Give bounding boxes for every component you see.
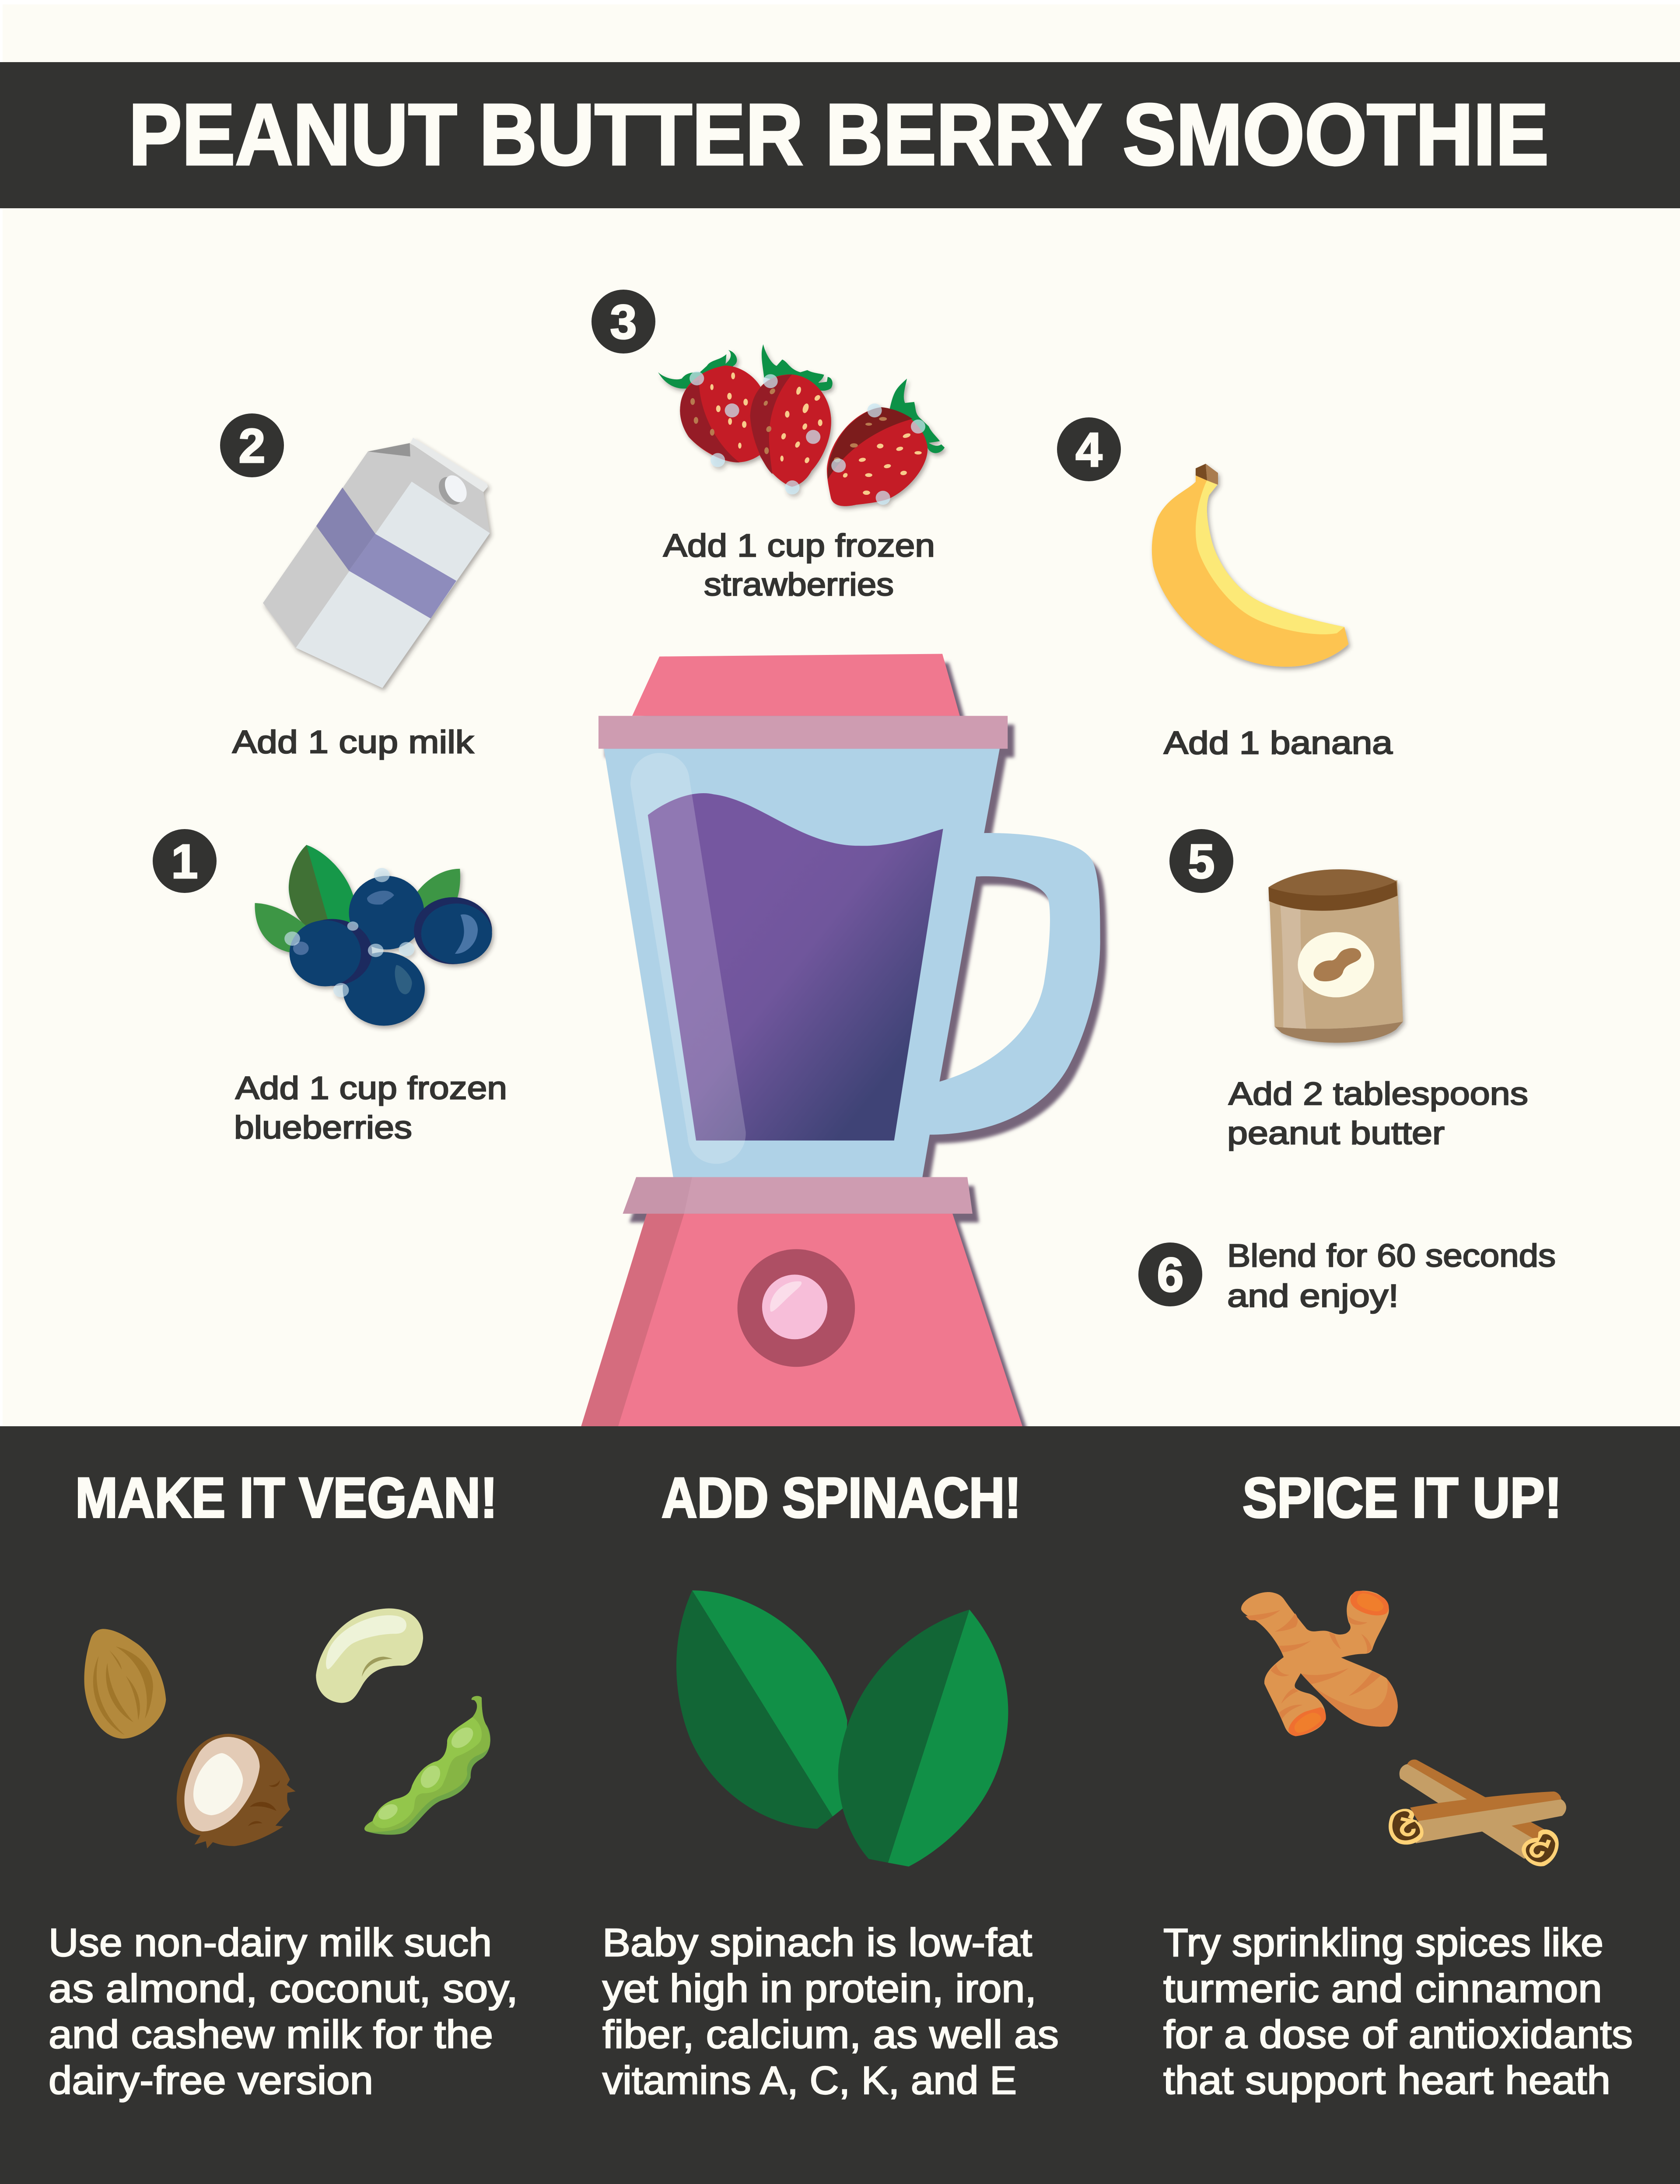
panel: tips <box>0 1426 1680 2184</box>
title: PEANUT BUTTER BERRY SMOOTHIE <box>129 86 1549 183</box>
blender silhouette with shadow <box>581 654 1100 1429</box>
text: make it vegan: as almond, coconut, soy, <box>49 1967 518 2011</box>
text: make it vegan: dairy-free version <box>49 2059 373 2103</box>
step 1 badge: 1 <box>171 835 198 889</box>
label: step 4: Add 1 banana <box>1164 725 1393 761</box>
label: step 6: and enjoy! <box>1227 1278 1399 1314</box>
heading: add spinach: ADD SPINACH! <box>662 1466 1021 1530</box>
step 3 badge <box>592 290 655 354</box>
icon: strawberries <box>658 344 945 506</box>
step 5 badge <box>1169 829 1233 893</box>
label: step 1 <box>234 1071 507 1145</box>
icon: edamame <box>364 1696 490 1835</box>
icon: peanut butter jar <box>1268 869 1403 1043</box>
label: step 5: peanut butter <box>1227 1116 1445 1151</box>
base shade <box>581 1214 684 1429</box>
text: add spinach: Baby spinach is low-fat <box>602 1921 1032 1965</box>
panel: make it vegan <box>49 1466 518 2103</box>
step 6 badge: 6 <box>1157 1248 1184 1302</box>
label: step 6: Blend for 60 seconds <box>1227 1238 1556 1274</box>
label: step 3 <box>663 528 935 602</box>
label: step 1: Add 1 cup frozen <box>235 1071 507 1106</box>
step 4 badge <box>1057 417 1121 481</box>
title banner <box>0 62 1680 208</box>
step 3 badge: 3 <box>610 295 637 349</box>
icon: spinach leaves <box>676 1590 1008 1866</box>
panel: spice it up <box>1163 1466 1633 2103</box>
label: step 5 <box>1227 1076 1528 1151</box>
smoothie liquid <box>648 793 943 1141</box>
text: add spinach: vitamins A, C, K, and E <box>602 2059 1017 2103</box>
jar highlight <box>630 753 746 1164</box>
icon: blueberries <box>255 845 492 1026</box>
blender details <box>581 753 943 1429</box>
text: make it vegan <box>49 1921 518 2103</box>
text: spice it up: Try sprinkling spices like <box>1163 1921 1603 1965</box>
label: step 3: Add 1 cup frozen <box>663 528 935 564</box>
heading: spice it up: SPICE IT UP! <box>1242 1466 1562 1530</box>
text: spice it up <box>1163 1921 1633 2103</box>
panel: add spinach <box>602 1466 1059 2103</box>
step 4 badge: 4 <box>1075 423 1102 477</box>
step 1 badge <box>153 829 217 893</box>
label: step 1: blueberries <box>234 1110 412 1145</box>
blender <box>581 654 1100 1429</box>
icon: coconut <box>177 1734 296 1848</box>
icon: milk carton <box>263 438 490 688</box>
text: spice it up: that support heart heath <box>1163 2059 1610 2103</box>
icon: cashew <box>316 1608 423 1703</box>
label: step 2: Add 1 cup milk <box>232 724 474 760</box>
icon: turmeric root <box>1241 1591 1398 1736</box>
icon: cinnamon sticks <box>1389 1760 1566 1866</box>
text: add spinach: fiber, calcium, as well as <box>602 2013 1059 2057</box>
text: make it vegan: and cashew milk for the <box>49 2013 493 2057</box>
step 6 badge <box>1138 1242 1202 1306</box>
step 2 badge <box>220 413 284 477</box>
text: spice it up: turmeric and cinnamon <box>1163 1967 1602 2011</box>
label: step 6 <box>1227 1238 1556 1314</box>
text: spice it up: for a dose of antioxidants <box>1163 2013 1633 2057</box>
blender button <box>738 1249 855 1367</box>
heading: make it vegan: MAKE IT VEGAN! <box>75 1466 497 1530</box>
text: make it vegan: Use non-dairy milk such <box>49 1921 492 1965</box>
label: step 3: strawberries <box>704 567 894 602</box>
label: step 5: Add 2 tablespoons <box>1228 1076 1528 1112</box>
step 5 badge: 5 <box>1188 835 1215 889</box>
text: add spinach: yet high in protein, iron, <box>602 1967 1036 2011</box>
icon: banana <box>1152 464 1348 667</box>
text: add spinach <box>602 1921 1059 2103</box>
icon: almond <box>84 1629 166 1739</box>
step 2 badge: 2 <box>238 419 266 473</box>
